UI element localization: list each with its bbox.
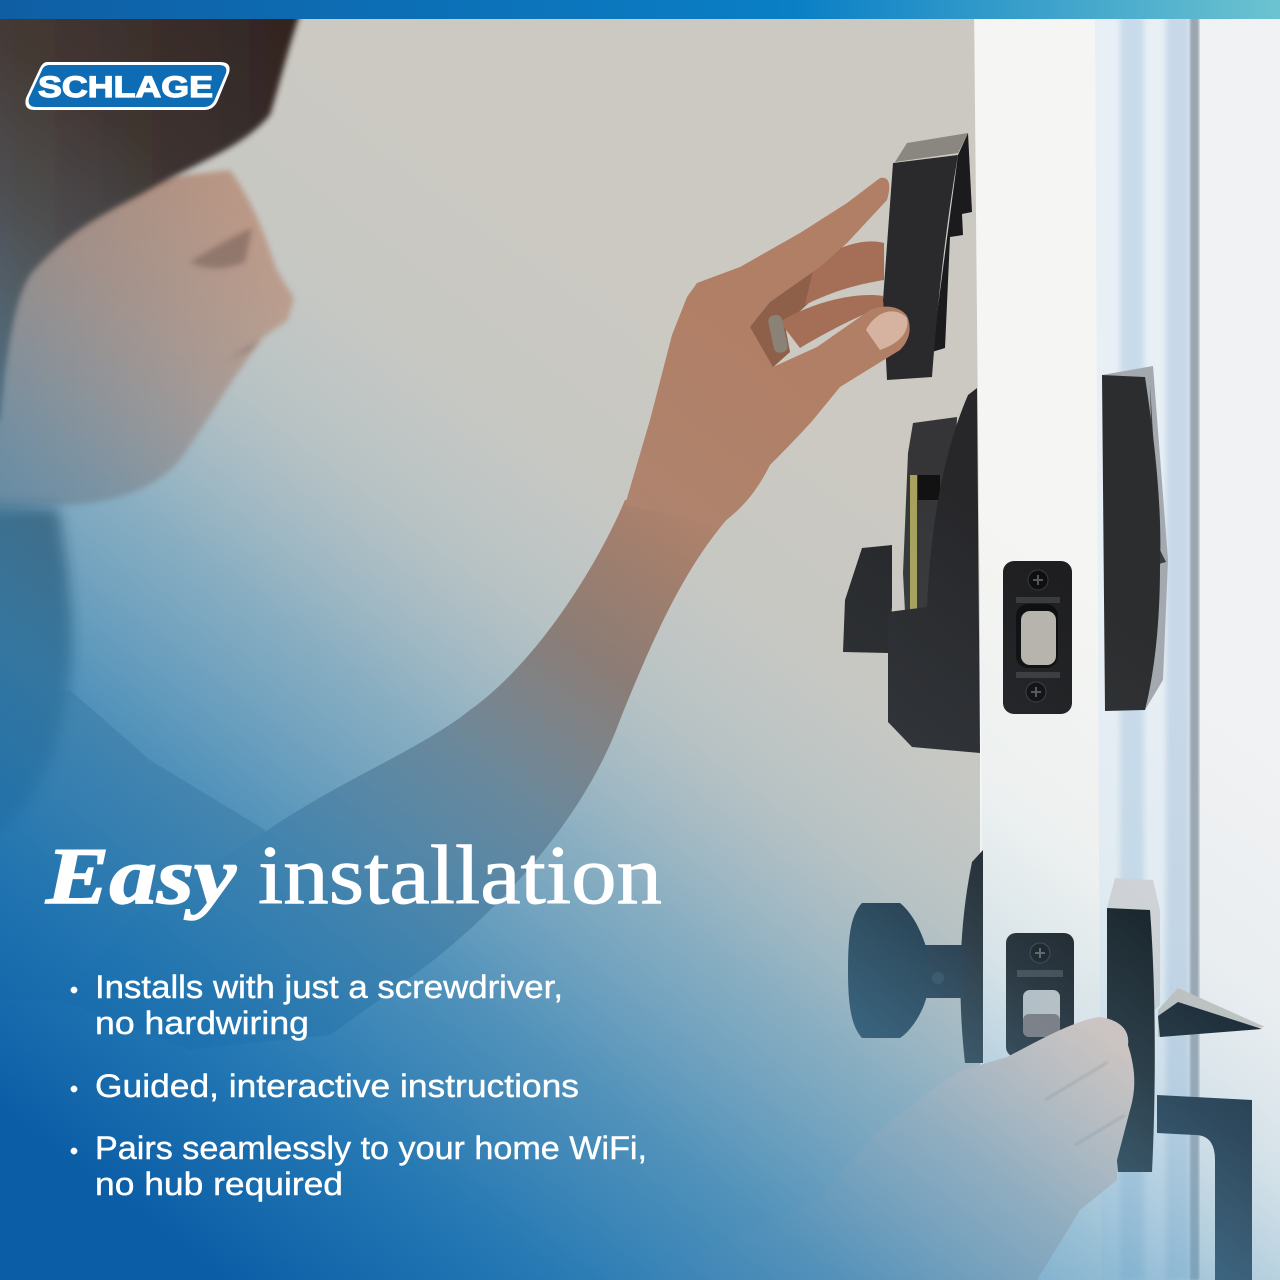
hair top — [0, 0, 310, 440]
wall background — [0, 0, 980, 1280]
title — [45, 829, 662, 922]
bullet: wifi pairing: Pairs seamlessly to your home WiFi, — [95, 1130, 647, 1166]
Schlage logo — [25, 62, 230, 110]
bullet list — [71, 969, 647, 1202]
bullet: wifi pairing: no hub required — [95, 1166, 343, 1202]
lower hand — [640, 1017, 1134, 1280]
face and neck — [0, 170, 294, 510]
thumbnail — [866, 311, 907, 350]
bullet: screwdriver: no hardwiring — [95, 1005, 309, 1041]
woman figure — [0, 0, 735, 1050]
eye and mouth shading — [190, 228, 262, 362]
lower exterior handleset — [1107, 878, 1265, 1280]
palm, index finger and thumb — [625, 178, 910, 525]
exterior keypad lock — [1102, 366, 1168, 711]
window beyond door — [1095, 0, 1280, 1280]
ring finger — [780, 295, 883, 348]
white door edge — [974, 0, 1101, 1280]
raised hand — [625, 178, 910, 525]
bullet: wifi pairing — [71, 1130, 647, 1202]
Schlage logo: SCHLAGE — [38, 71, 213, 104]
top gradient bar — [0, 0, 1280, 19]
title: Easy — [45, 833, 237, 921]
lower latch plate — [1006, 933, 1074, 1057]
palm shadow under fingers — [745, 262, 822, 370]
bullet: guided instructions: Guided, interactive instructions — [95, 1068, 579, 1104]
bullet: screwdriver — [71, 969, 563, 1041]
interior lock assembly — [843, 388, 980, 753]
middle finger — [805, 241, 884, 305]
title: installation — [258, 829, 662, 922]
bullet: screwdriver: Installs with just a screwdriver, — [95, 969, 563, 1005]
shirt and upper arm — [0, 690, 400, 1050]
lock cover held in hand — [883, 133, 972, 380]
hair lower — [0, 505, 72, 840]
latch plate with bolt — [1003, 561, 1072, 714]
forearm — [60, 500, 735, 1045]
lower lock with knob — [848, 850, 983, 1063]
ring — [767, 314, 789, 354]
